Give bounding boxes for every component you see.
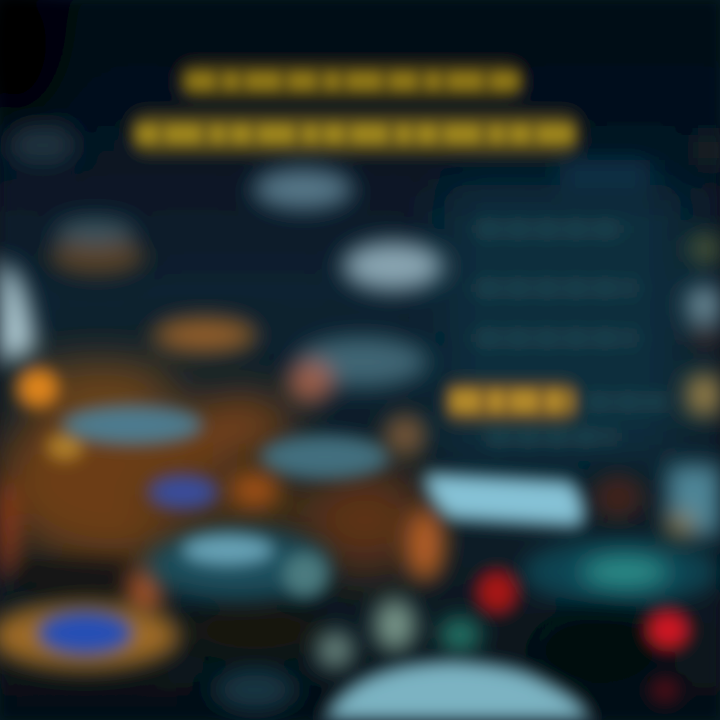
dish: large teal [146,531,330,599]
bottom pale teal dome [325,662,590,720]
icon: pale object left edge [0,262,34,362]
panel: right text panel [445,160,680,460]
icon: red dot left [477,571,517,613]
heading [134,66,576,152]
icon: orange glow [18,369,58,407]
highlighted gold text [447,384,575,420]
label: orange centre left [153,318,257,352]
right edge items [666,135,720,537]
dish: indigo [149,476,217,508]
icon: red dot right [647,611,689,702]
label: grey blue centre [288,337,428,402]
dark teal panel lower right [522,540,718,688]
panel: light blue bar [425,474,583,526]
bottom small pale items [215,599,480,712]
brown strip under blue bar [592,475,644,519]
label: top centre [253,169,353,209]
label: upper left [49,219,145,274]
warm brown mass lower left [0,360,430,575]
dish: blue grey [62,406,202,444]
icon: yellow spot [47,434,83,460]
dish: teal centre [261,436,389,478]
dish: blue on orange [0,603,180,669]
label: centre right [343,242,443,290]
orange highlights [0,415,443,614]
dark pools lower left [18,565,320,656]
